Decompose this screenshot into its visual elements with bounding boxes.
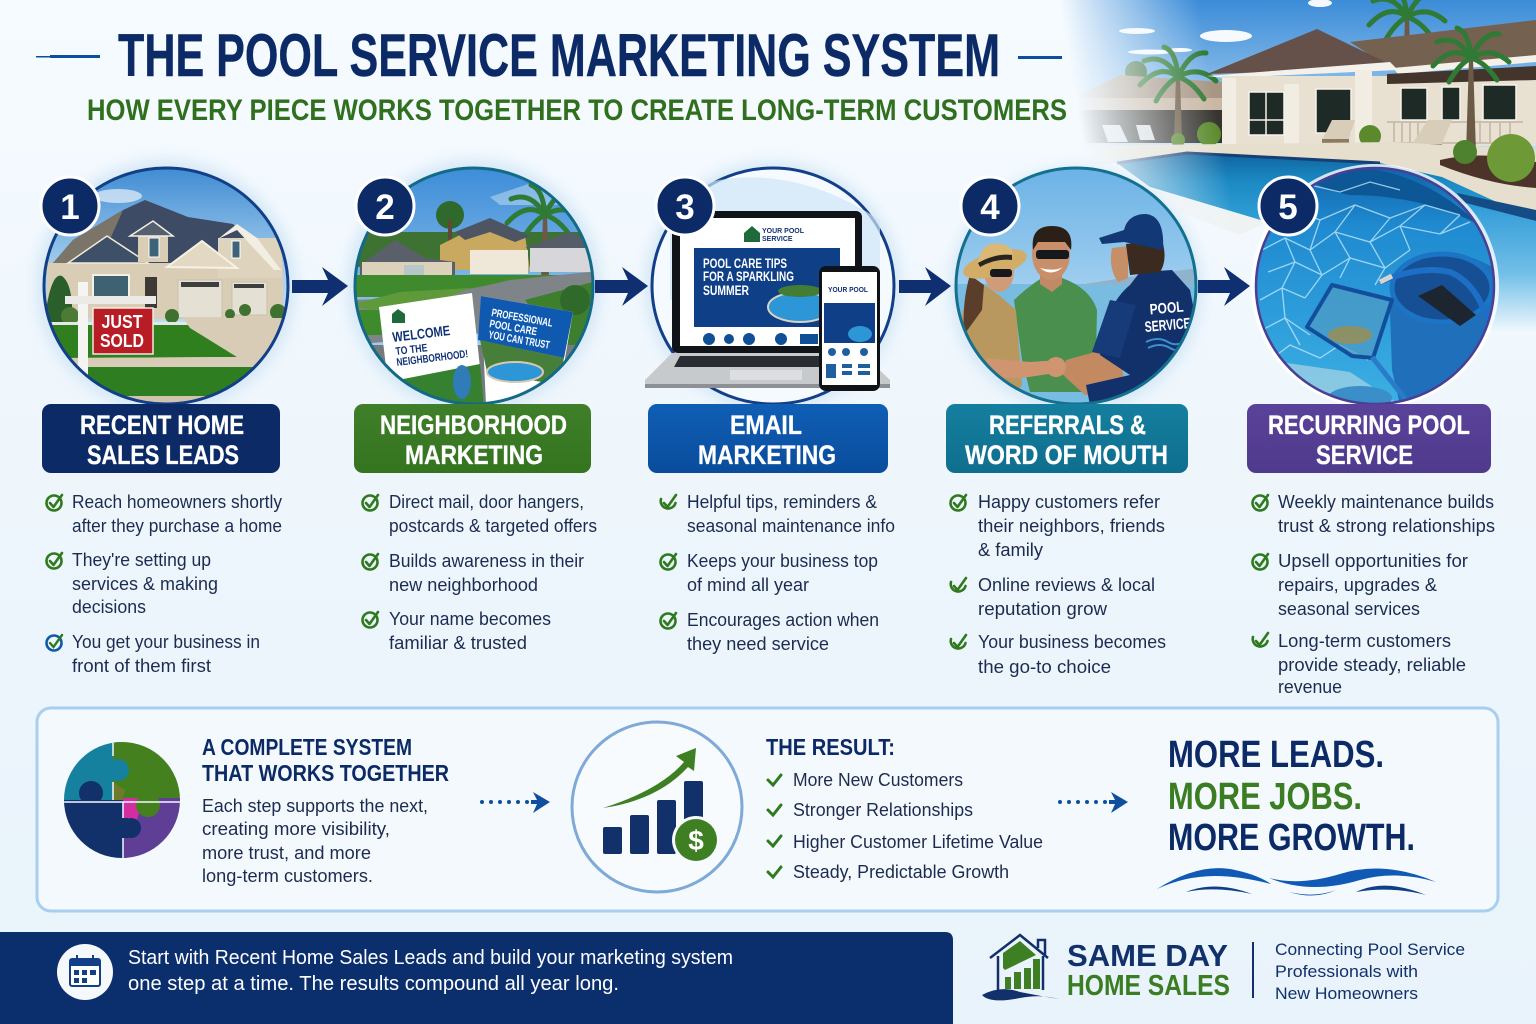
subtitle: HOW EVERY PIECE WORKS TOGETHER TO CREATE LONG-TERM CUSTOMERS <box>87 94 1067 127</box>
heading: the result: THE RESULT: <box>766 734 895 760</box>
step number badge 1: 1 <box>60 188 80 227</box>
panel: complete system and result <box>37 708 1498 911</box>
flyer: professional pool care: POOL CARE <box>488 318 538 338</box>
step 3 photo: laptop and phone email: YOUR POOL <box>762 228 805 235</box>
step 5 photo: pool skimmer net and bucket <box>1250 164 1500 410</box>
text: system description: more trust, and more <box>202 843 371 863</box>
label: recent home sales leads: SALES LEADS <box>87 440 239 470</box>
flyer: welcome to the neighborhood: WELCOME <box>391 322 451 345</box>
bullets: step 2: Direct mail, door hangers, <box>389 492 584 512</box>
icon: growth chart with dollar coin: $ <box>688 825 704 856</box>
text: call to action <box>128 947 733 995</box>
bullets: step 1: They're setting up <box>72 550 211 570</box>
icon: puzzle circle <box>64 742 180 858</box>
step 3 photo: laptop and phone email: POOL CARE TIPS <box>703 256 787 271</box>
bullets: step 5: Upsell opportunities for <box>1278 551 1468 571</box>
step number badge 2: 2 <box>375 188 395 227</box>
step 3 photo: laptop and phone email: YOUR POOL <box>828 287 869 294</box>
statement: more leads, jobs, growth: MORE LEADS. <box>1168 734 1384 776</box>
label: email marketing: MARKETING <box>698 440 836 470</box>
step number badge 5 <box>1259 177 1317 235</box>
label: recent home sales leads: RECENT HOME <box>80 410 244 440</box>
logo: same day home sales: HOME SALES <box>1067 970 1230 1002</box>
bullets: step 5: Long-term customers <box>1278 631 1451 651</box>
bullets: step 1: after they purchase a home <box>72 516 282 536</box>
bullets: step 4: the go-to choice <box>978 657 1111 677</box>
heading: a complete system: THAT WORKS TOGETHER <box>202 760 449 786</box>
step 3 photo: laptop and phone email: FOR A SPARKLING <box>703 269 794 284</box>
photo: poolside house header <box>1040 0 1536 332</box>
bullets: step 2: familiar & trusted <box>389 633 527 653</box>
label: neighborhood marketing <box>354 404 591 473</box>
step number badge 4 <box>961 177 1019 235</box>
step 3 photo: laptop and phone email <box>645 168 894 404</box>
arrow: dotted to result icon <box>480 792 550 813</box>
list: result items: Steady, Predictable Growth <box>793 862 1009 882</box>
bullets: step 4: & family <box>978 540 1043 560</box>
divider and tagline: Connecting Pool Service <box>1275 941 1465 959</box>
step 1 photo: house with just sold sign <box>40 165 292 407</box>
bullets: step 4 <box>950 492 1166 677</box>
label: email marketing <box>648 404 888 473</box>
text: system description <box>202 796 428 886</box>
bullets: step 1: decisions <box>72 597 146 617</box>
label: referrals and word of mouth <box>946 404 1188 473</box>
bullets: step 1: services & making <box>72 574 218 594</box>
flyer: welcome to the neighborhood: TO THE <box>395 342 428 358</box>
logo: same day home sales: SAME DAY <box>1067 938 1228 973</box>
step 4 photo: homeowners and pool technician <box>950 165 1202 409</box>
arrow 1 to 2 <box>292 267 348 306</box>
step number badge 3: 3 <box>675 188 695 227</box>
statement: more leads, jobs, growth: MORE GROWTH. <box>1168 817 1415 859</box>
step number badge 2 <box>356 177 414 235</box>
title: THE POOL SERVICE MARKETING SYSTEM <box>118 22 1000 89</box>
icon: growth chart with dollar coin <box>572 722 742 892</box>
icon: calendar <box>57 944 113 1000</box>
bullets: step 3: of mind all year <box>687 575 809 595</box>
bullets: step 4: Your business becomes <box>978 632 1166 652</box>
bullets: step 4: Happy customers refer <box>978 492 1160 512</box>
bullets: step 4: reputation grow <box>978 599 1108 619</box>
text: system description: Each step supports the next, <box>202 796 428 816</box>
arrow: dotted to growth statement <box>1058 792 1128 813</box>
sign: just sold <box>93 308 153 354</box>
footer banner <box>0 932 953 1024</box>
bullets: step 2: postcards & targeted offers <box>389 516 597 536</box>
bullets: step 5: revenue <box>1278 677 1342 697</box>
divider and tagline <box>1252 941 1465 1003</box>
text: call to action: Start with Recent Home Sales Leads and build your marketing system <box>128 947 733 969</box>
label: neighborhood marketing: NEIGHBORHOOD <box>380 410 567 440</box>
flyer: professional pool care: PROFESSIONAL <box>490 307 554 330</box>
bullets: step 5: trust & strong relationships <box>1278 516 1495 536</box>
bullets: step 3: Keeps your business top <box>687 551 878 571</box>
heading: a complete system <box>202 734 449 786</box>
step number badge 4: 4 <box>980 188 1000 227</box>
statement: more leads, jobs, growth: MORE JOBS. <box>1168 776 1362 818</box>
bullets: step 3: they need service <box>687 634 829 654</box>
list: result items: Higher Customer Lifetime Value <box>793 832 1043 852</box>
bullets: step 1: front of them first <box>72 656 211 676</box>
bullets: step 3: Encourages action when <box>687 610 879 630</box>
bullets: step 5: seasonal services <box>1278 599 1420 619</box>
arrow 3 to 4 <box>899 267 951 306</box>
bullets: step 3 <box>660 492 895 654</box>
heading: a complete system: A COMPLETE SYSTEM <box>202 734 412 760</box>
bullets: step 1 <box>46 492 282 676</box>
bullets: step 2: Builds awareness in their <box>389 551 584 571</box>
label: referrals and word of mouth: REFERRALS & <box>989 410 1146 440</box>
bullets: step 4: Online reviews & local <box>978 575 1155 595</box>
label: recurring pool service: RECURRING POOL <box>1268 410 1470 440</box>
statement: more leads, jobs, growth <box>1168 734 1415 859</box>
label: neighborhood marketing: MARKETING <box>405 440 543 470</box>
list: result items: Stronger Relationships <box>793 800 973 820</box>
step number badge 5: 5 <box>1278 188 1298 227</box>
logo: same day home sales <box>982 935 1230 1002</box>
icon: water waves <box>1157 868 1436 896</box>
step 4 photo: homeowners and pool technician: SERVICE <box>1144 315 1191 336</box>
label: referrals and word of mouth: WORD OF MOUTH <box>965 440 1168 470</box>
step 4 photo: homeowners and pool technician: POOL <box>1149 299 1184 318</box>
bullets: step 3: seasonal maintenance info <box>687 516 895 536</box>
bullets: step 5: Weekly maintenance builds <box>1278 492 1494 512</box>
bullets: step 1: Reach homeowners shortly <box>72 492 282 512</box>
text: system description: creating more visibility, <box>202 819 390 839</box>
bullets: step 2 <box>362 492 597 653</box>
label: recurring pool service <box>1247 404 1491 473</box>
bullets: step 5 <box>1252 492 1495 697</box>
flyer: professional pool care <box>478 296 573 405</box>
bullets: step 4: their neighbors, friends <box>978 516 1165 536</box>
step 3 photo: laptop and phone email: SERVICE <box>762 236 793 243</box>
step 3 photo: laptop and phone email: SUMMER <box>703 283 749 298</box>
bullets: step 3: Helpful tips, reminders & <box>687 492 877 512</box>
list: result items <box>768 770 1043 882</box>
divider and tagline: New Homeowners <box>1275 985 1418 1003</box>
arrow 2 to 3 <box>595 267 648 306</box>
bullets: step 5: repairs, upgrades & <box>1278 575 1437 595</box>
label: recent home sales leads <box>42 404 280 473</box>
label: email marketing: EMAIL <box>730 410 802 440</box>
bullets: step 2: Your name becomes <box>389 609 551 629</box>
step 2 photo: neighborhood with flyers <box>350 165 600 410</box>
bullets: step 5: provide steady, reliable <box>1278 655 1466 675</box>
list: result items: More New Customers <box>793 770 963 790</box>
text: system description: long-term customers. <box>202 866 373 886</box>
flyer: welcome to the neighborhood <box>379 293 484 410</box>
text: call to action: one step at a time. The results compound all year long. <box>128 973 619 995</box>
bullets: step 2: new neighborhood <box>389 575 538 595</box>
divider and tagline: Professionals with <box>1275 963 1418 981</box>
bullets: step 1: You get your business in <box>72 632 260 652</box>
icon: house with bars <box>982 935 1059 1000</box>
sign: just sold: JUST <box>102 312 142 332</box>
flyer: welcome to the neighborhood: NEIGHBORHOOD! <box>396 348 469 369</box>
title decoration lines <box>36 55 1062 59</box>
step number badge 1 <box>41 177 99 235</box>
flyer: professional pool care: YOU CAN TRUST <box>487 329 551 352</box>
label: recurring pool service: SERVICE <box>1316 440 1413 470</box>
sign: just sold: SOLD <box>100 331 144 351</box>
step number badge 3 <box>656 177 714 235</box>
arrow 4 to 5 <box>1198 267 1250 306</box>
